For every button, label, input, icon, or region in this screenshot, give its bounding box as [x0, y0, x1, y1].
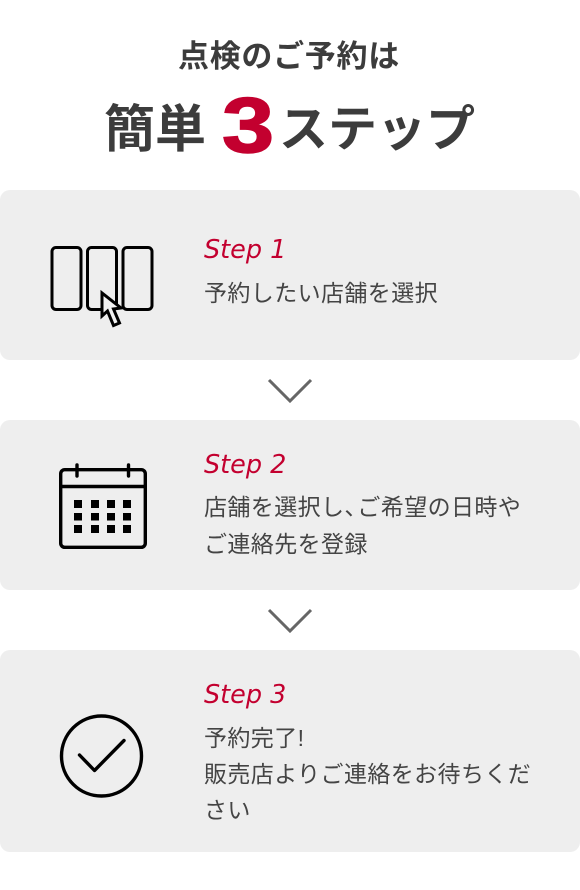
title line: 簡単3ステップ: [104, 81, 475, 169]
title line: 点検のご予約は: 点検のご予約は: [178, 39, 400, 74]
arrow: down chevron 2: [268, 609, 312, 633]
icon: check mark in circle: [60, 714, 144, 798]
panel: step 2: [0, 420, 580, 590]
step description: 販売店よりご連絡をお待ちくだ: [204, 761, 531, 787]
icon: store columns with cursor: [50, 246, 154, 328]
arrow: down chevron 1: [268, 379, 312, 403]
heading numeral: 3: 3: [222, 81, 274, 169]
step description: [204, 725, 531, 823]
heading word: ステップ: ステップ: [279, 103, 475, 157]
step description: 予約したい店舗を選択: [204, 280, 438, 306]
panel: step 3: [0, 650, 580, 852]
step description: 店舗を選択し、ご希望の日時や: [204, 494, 521, 520]
step label: Step 3: Step 3: [204, 680, 286, 710]
icon: calendar: [59, 463, 147, 549]
step description: ご連絡先を登録: [204, 531, 368, 557]
step description: 予約完了!: [204, 725, 304, 751]
step description: [204, 494, 521, 557]
heading word: 簡単: 簡単: [104, 101, 206, 158]
step description: さい: [204, 797, 251, 823]
step label: Step 1: Step 1: [204, 235, 286, 265]
panel: step 1: [0, 190, 580, 360]
step label: Step 2: Step 2: [204, 450, 286, 480]
